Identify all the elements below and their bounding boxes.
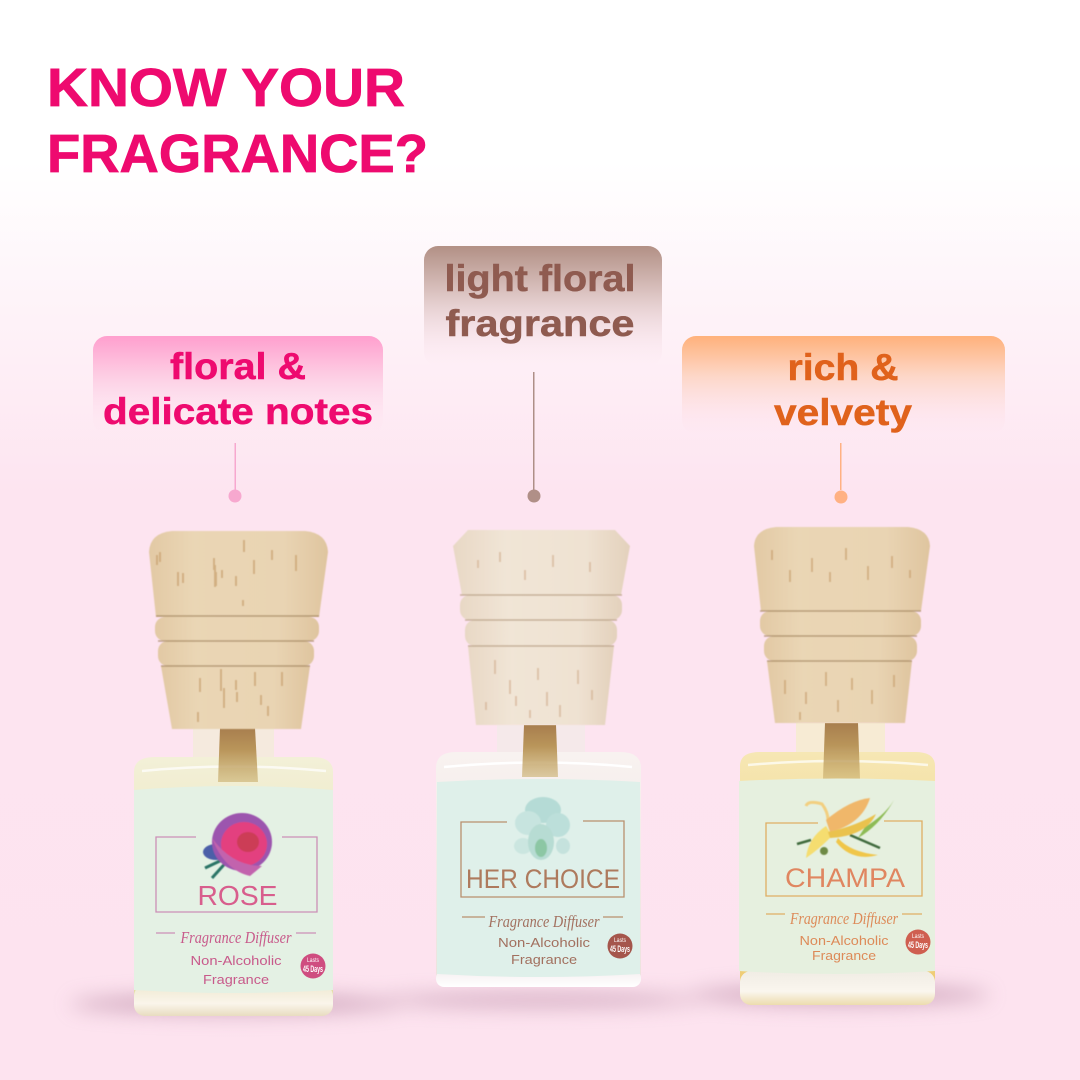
callout: her choice: light floral bbox=[444, 258, 636, 299]
icon: rose flower bbox=[203, 813, 272, 878]
bottle: rose bbox=[134, 531, 333, 1016]
tagline: champa bbox=[766, 909, 922, 963]
tagline: her choice: Fragrance Diffuser bbox=[488, 912, 600, 931]
label bbox=[739, 778, 935, 974]
name: her choice: HER CHOICE bbox=[466, 864, 620, 894]
label frame bbox=[766, 821, 922, 896]
icon: champa flower bbox=[797, 798, 894, 858]
badge: lasts 45 days: 45 Days bbox=[303, 964, 323, 974]
glass body bbox=[134, 728, 333, 1016]
callout: champa bbox=[682, 336, 1005, 434]
tagline: rose bbox=[156, 928, 316, 987]
callout: champa: rich & bbox=[788, 347, 898, 388]
bottle: champa bbox=[739, 527, 935, 1005]
badge: lasts 45 days bbox=[906, 930, 930, 954]
callout: champa: velvety bbox=[774, 392, 912, 433]
tagline: champa: Fragrance Diffuser bbox=[789, 909, 898, 928]
tagline: champa: Non-Alcoholic bbox=[800, 933, 889, 948]
badge: lasts 45 days: Lasts bbox=[307, 958, 319, 964]
badge: lasts 45 days bbox=[300, 954, 326, 978]
glass body bbox=[436, 725, 641, 987]
cap bbox=[754, 527, 930, 723]
label bbox=[437, 779, 640, 977]
badge: lasts 45 days bbox=[608, 934, 632, 958]
label frame bbox=[156, 837, 317, 912]
badge: lasts 45 days: 45 Days bbox=[908, 940, 928, 950]
tagline: rose: Fragrance Diffuser bbox=[180, 928, 292, 947]
callout: rose: delicate notes bbox=[103, 391, 373, 432]
glass body bbox=[740, 723, 935, 1005]
title: KNOW YOUR bbox=[47, 58, 405, 118]
cap bbox=[453, 530, 630, 725]
tagline: her choice bbox=[462, 912, 623, 967]
tagline: rose: Fragrance bbox=[203, 972, 269, 987]
name: champa: CHAMPA bbox=[785, 863, 905, 893]
tagline: her choice: Non-Alcoholic bbox=[498, 935, 591, 950]
icon: white flower bbox=[514, 797, 570, 860]
label frame bbox=[461, 821, 624, 897]
callout: her choice: fragrance bbox=[446, 303, 634, 344]
badge: lasts 45 days: Lasts bbox=[912, 934, 924, 940]
cap bbox=[149, 531, 328, 729]
connector: her choice bbox=[528, 372, 540, 502]
callout: rose: floral & bbox=[170, 346, 306, 387]
title bbox=[47, 58, 428, 184]
shadow under bottles bbox=[70, 985, 990, 1014]
tagline: her choice: Fragrance bbox=[511, 952, 577, 967]
name: rose: ROSE bbox=[198, 880, 278, 911]
tagline: champa: Fragrance bbox=[812, 948, 876, 963]
callout: rose bbox=[93, 336, 383, 434]
badge: lasts 45 days: 45 Days bbox=[610, 944, 630, 954]
callout: her choice bbox=[424, 246, 662, 366]
badge: lasts 45 days: Lasts bbox=[614, 938, 626, 944]
tagline: rose: Non-Alcoholic bbox=[190, 953, 282, 968]
connector: champa bbox=[834, 443, 848, 504]
label bbox=[134, 786, 333, 993]
bottle: her choice bbox=[436, 530, 641, 987]
connector: rose bbox=[228, 443, 242, 502]
title: FRAGRANCE? bbox=[47, 124, 428, 184]
